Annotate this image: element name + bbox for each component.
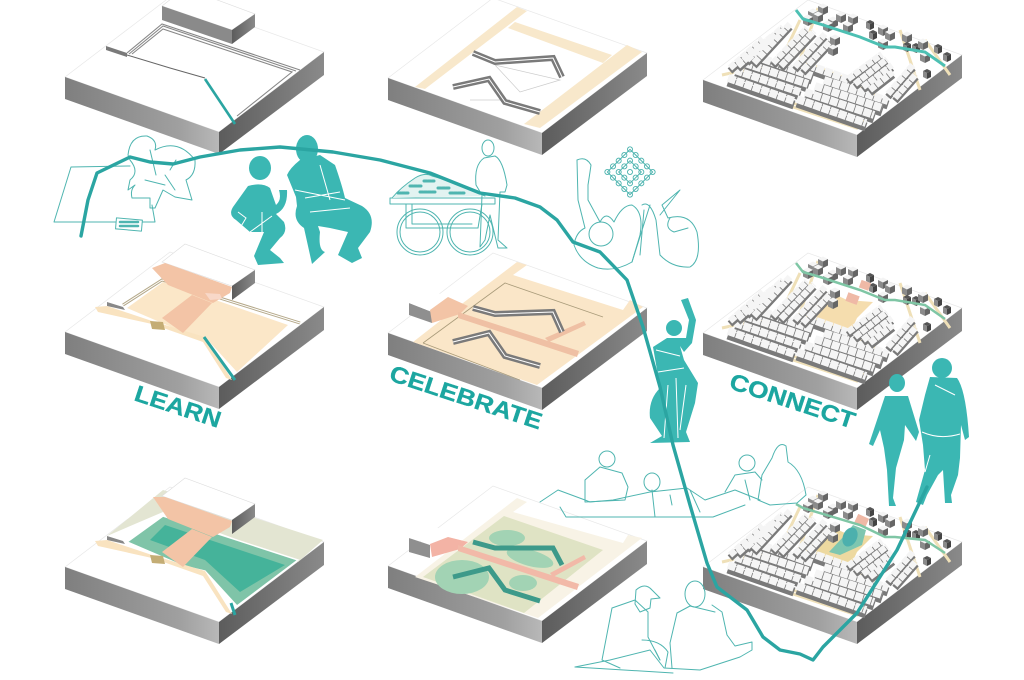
- panel: learn proposed water: [65, 478, 324, 644]
- figure: fruit vendor with cart: [390, 140, 507, 255]
- panel: celebrate existing site: [388, 0, 647, 155]
- heading: LEARN: LEARN: [131, 381, 224, 433]
- panel: celebrate proposed cream layer: [388, 253, 647, 410]
- figure: two people sitting on a mat: [575, 581, 752, 673]
- figure: two people drawing rangoli seen from above: [574, 159, 698, 269]
- heading: CONNECT: CONNECT: [726, 369, 858, 434]
- figure: teal dancer: [650, 298, 698, 443]
- figure: person drawing on paper: [54, 136, 195, 231]
- panel: celebrate proposed water: [388, 486, 647, 643]
- figure: teal couple walking: [869, 358, 969, 506]
- figure: rangoli pattern: [604, 146, 656, 198]
- panel: learn existing site: [65, 0, 324, 154]
- heading: CELEBRATE: CELEBRATE: [386, 361, 545, 435]
- figure: group resting on the ground: [540, 444, 806, 517]
- figure: teal man crouching: [287, 135, 372, 264]
- panel: connect proposed water: [703, 487, 962, 644]
- panel: learn proposed cream layer: [65, 244, 324, 409]
- panel: connect proposed neighbourhood: [703, 253, 962, 410]
- river line: [81, 147, 927, 660]
- figure: teal boy crouching: [231, 156, 287, 265]
- panel: connect existing neighbourhood: [703, 0, 962, 157]
